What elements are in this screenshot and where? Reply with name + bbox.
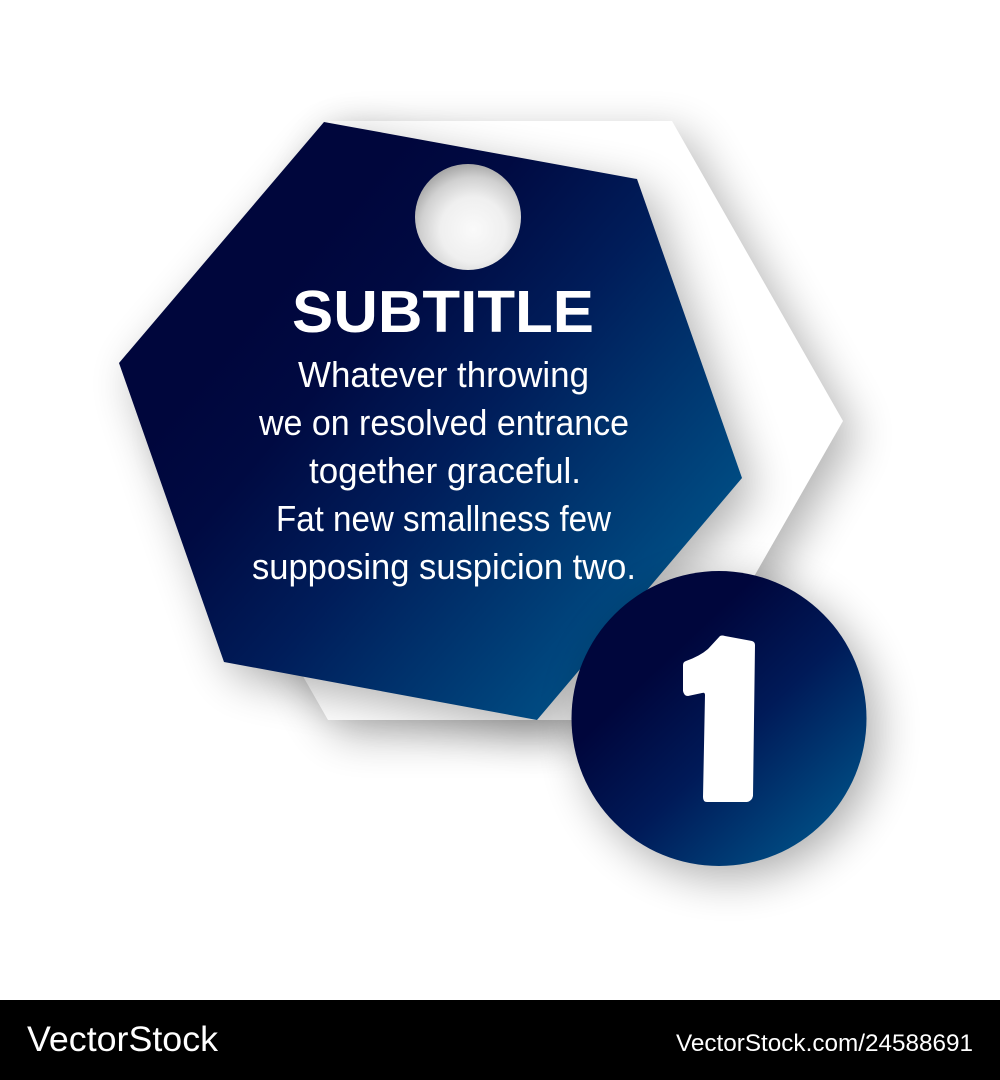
number badge (572, 571, 877, 878)
body text: supposing suspicion two. (252, 546, 636, 587)
body text (252, 354, 636, 587)
heading: subtitle: SUBTITLE (292, 279, 594, 345)
footer bar (0, 1000, 1000, 1080)
body text: together graceful. (309, 450, 581, 491)
body text: Whatever throwing (298, 354, 589, 395)
white hexagon back panel (157, 121, 855, 734)
footer logo text: VectorStock (27, 1020, 219, 1059)
navy hexagon panel (119, 122, 754, 734)
body text: we on resolved entrance (258, 402, 629, 443)
footer image id: VectorStock.com/24588691 (676, 1030, 973, 1057)
hexagon punch hole (415, 164, 521, 270)
body text: Fat new smallness few (276, 498, 612, 539)
numeral 1 (683, 636, 755, 802)
